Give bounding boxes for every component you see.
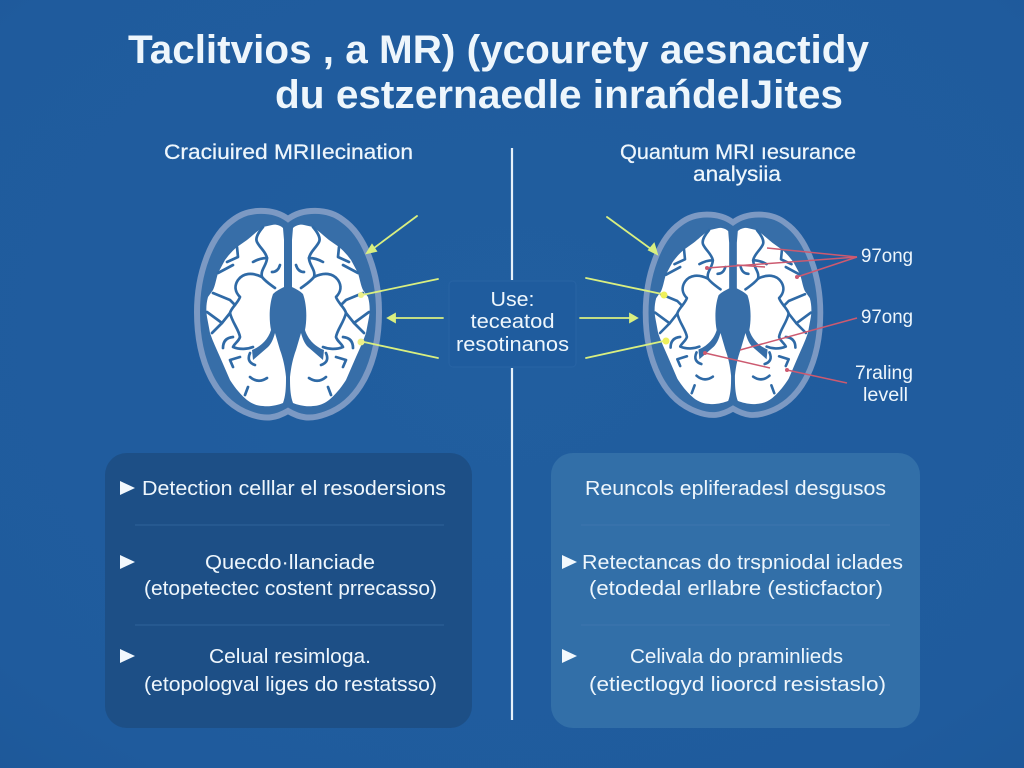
panel: right findings: Retectancas do trspniodal iclades — [582, 551, 903, 574]
panel: left findings: (etopetectec costent prrecasso) — [144, 577, 437, 600]
panel: right findings: (etodedal erllabre (esticfactor) — [589, 577, 883, 600]
labels: right scan: 7raling — [855, 363, 913, 384]
heading: right column: Quantum MRI ıesurance — [620, 141, 856, 164]
panel: left findings: (etopologval liges do restatsso) — [144, 673, 437, 696]
title: Taclitvios , a MR) (ycourety aesnactidy — [128, 28, 870, 72]
arrows: left scan — [358, 216, 443, 358]
brain: left scan — [197, 211, 379, 418]
labels: right scan: 97ong — [861, 246, 913, 267]
center callout: Use: — [490, 289, 534, 311]
panel: right findings: (etiectlogyd lioorcd resistaslo) — [589, 673, 886, 696]
central divider — [511, 148, 513, 720]
heading: left column: Craciuired MRIIecination — [164, 141, 413, 164]
panel: right findings: Celivala do praminlieds — [630, 645, 843, 668]
heading: right column — [620, 141, 856, 186]
panel: left findings: Detection celllar el resodersions — [142, 477, 446, 500]
panel: left findings: Celual resimloga. — [209, 645, 371, 668]
center callout — [449, 281, 576, 367]
title — [128, 28, 870, 117]
panel: left findings — [105, 453, 472, 728]
heading: right column: analysiia — [693, 163, 781, 186]
panel: right findings — [551, 453, 920, 728]
arrows: right scan — [580, 217, 670, 358]
labels: right scan — [855, 246, 913, 406]
title: du estzernaedle inrańdelJites — [275, 73, 843, 117]
panel: right findings: Reuncols epliferadesl desgusos — [585, 477, 886, 500]
brain: right scan — [646, 215, 820, 415]
labels: right scan: levell — [863, 385, 908, 406]
labels: right scan: 97ong — [861, 307, 913, 328]
center callout: resotinanos — [456, 334, 569, 356]
panel: left findings: Quecdo·llanciade — [205, 551, 375, 574]
center callout: teceatod — [470, 311, 554, 333]
red annotation lines — [703, 248, 857, 383]
